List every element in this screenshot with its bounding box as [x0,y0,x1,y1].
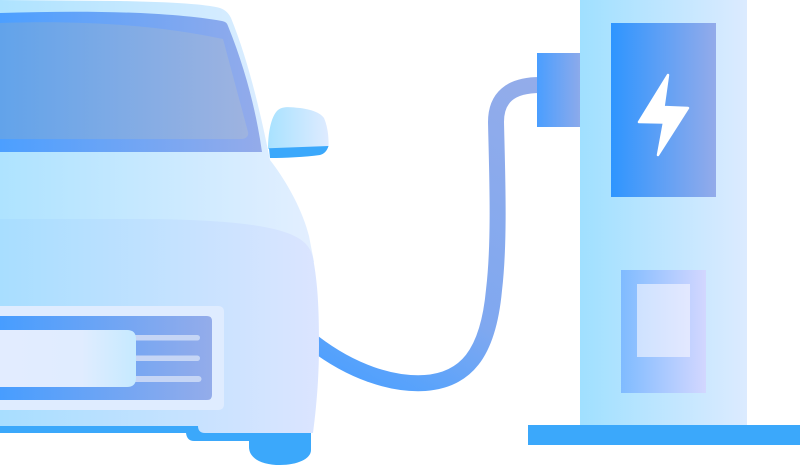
windshield glass [0,22,248,139]
mirror housing [268,107,329,149]
windshield frame [0,12,262,152]
lower panel window [637,284,690,357]
car [0,0,329,465]
headlight [0,330,136,387]
front wheel [249,430,311,465]
plug socket [537,53,580,127]
charging cable [314,85,540,383]
bumper underside [0,420,255,441]
grille surround [0,306,224,410]
charging station [528,0,800,445]
station post [580,0,747,425]
upper body [0,0,314,262]
grille [0,316,212,400]
mirror lower trim [269,146,328,158]
lower body [0,219,319,433]
grille slats [120,335,202,382]
station base [528,425,800,445]
lower panel [621,270,706,393]
station screen [611,23,716,197]
icon: lightning bolt [639,75,688,155]
side mirror [268,107,329,158]
